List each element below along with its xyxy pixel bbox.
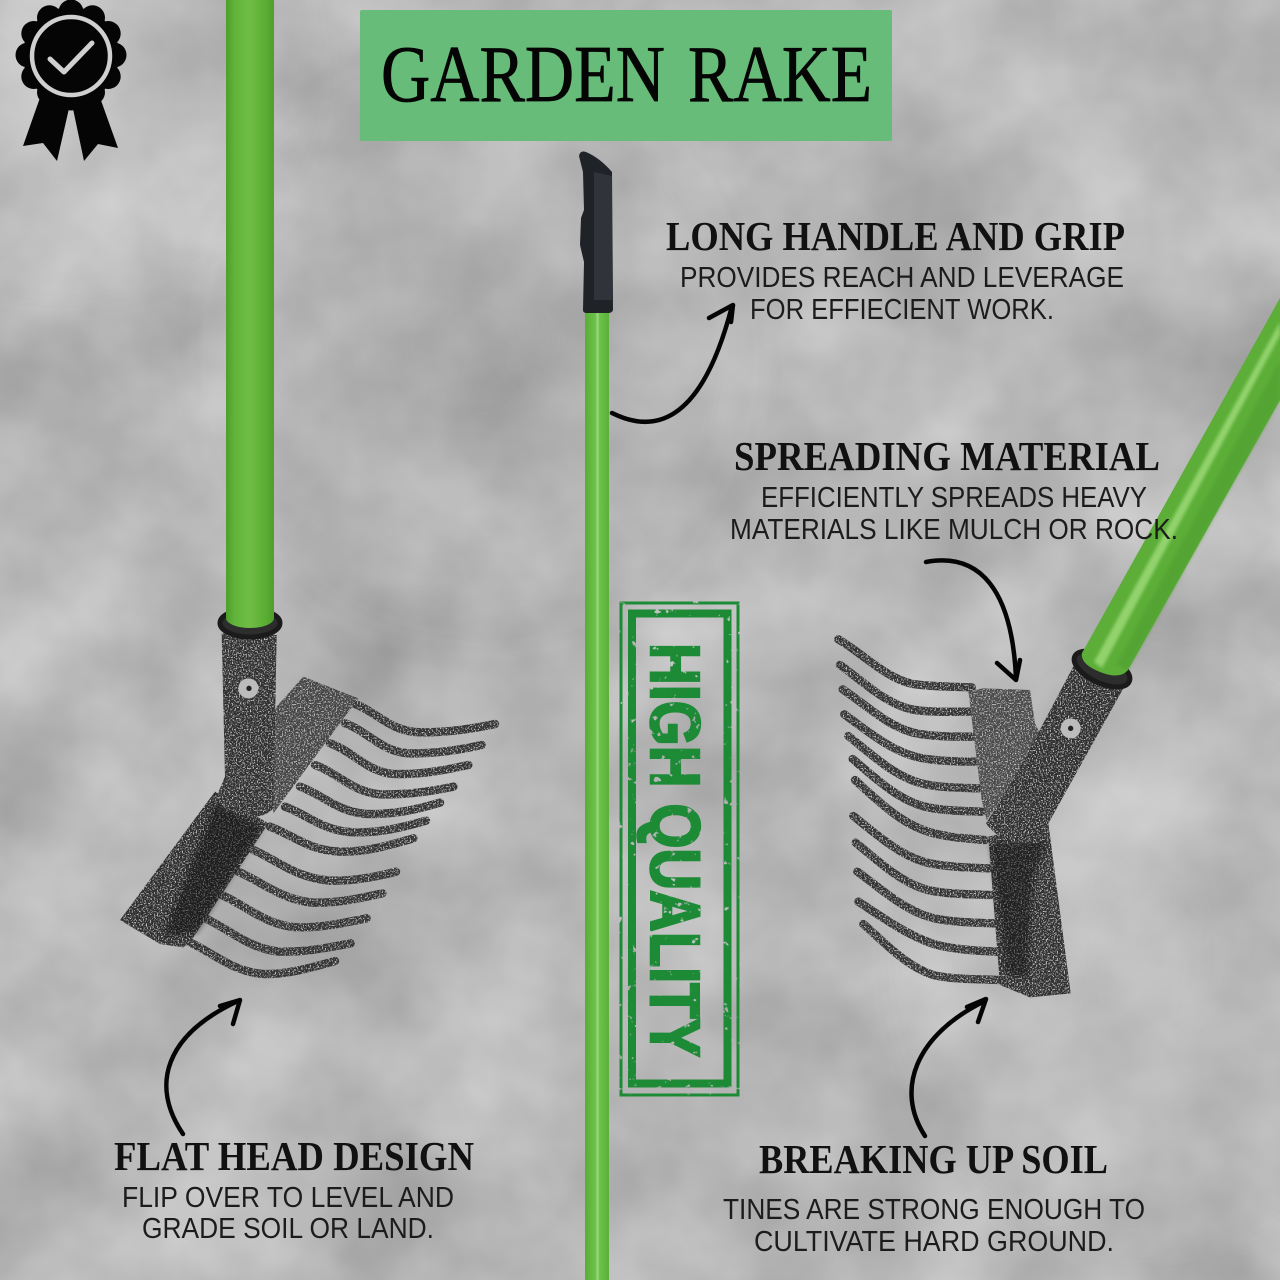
left rake lower plate	[120, 792, 268, 947]
callout: spreading material: SPREADING MATERIAL	[734, 433, 1160, 479]
right rake tines	[838, 639, 1001, 980]
left rake bolt	[238, 678, 258, 698]
title banner	[360, 10, 892, 141]
callout: long handle and grip: FOR EFFIECIENT WORK.	[750, 294, 1054, 326]
stamp: high quality: HIGH QUALITY	[636, 643, 714, 1057]
arrow: to handle	[612, 305, 733, 422]
callout: spreading material: MATERIALS LIKE MULCH OR ROCK.	[730, 514, 1178, 546]
callout: flat head design: FLIP OVER TO LEVEL AND	[122, 1182, 454, 1214]
arrow: to tines	[912, 999, 986, 1136]
arrow: to spreading plate	[926, 560, 1020, 680]
stamp: high quality	[621, 603, 738, 1095]
right rake lower plate	[988, 823, 1071, 997]
left rake socket	[215, 633, 277, 817]
left rake head	[120, 633, 495, 974]
left rake handle	[226, 0, 274, 628]
callout: long handle and grip: PROVIDES REACH AND LEVERAGE	[680, 262, 1124, 294]
left rake upper plate	[267, 677, 358, 813]
left rake collar ring	[220, 609, 280, 637]
right rake upper plate	[968, 688, 1043, 820]
callout: breaking up soil: BREAKING UP SOIL	[759, 1136, 1108, 1182]
left rake plate shadow	[163, 803, 263, 937]
callout: breaking up soil	[723, 1136, 1145, 1258]
title banner: GARDEN	[381, 31, 665, 119]
right rake plate shadow	[990, 840, 1048, 980]
arrow: to flat head	[166, 1000, 240, 1134]
left rake tines	[188, 703, 495, 974]
callout: flat head design: GRADE SOIL OR LAND.	[142, 1213, 434, 1245]
title banner: RAKE	[688, 31, 872, 119]
right rake head	[838, 639, 1123, 997]
badge icon: ribbon with check mark	[16, 0, 126, 161]
right rake collar ring	[1069, 644, 1135, 694]
right rake socket	[986, 663, 1123, 844]
callout: flat head design	[114, 1133, 474, 1245]
callout: flat head design: FLAT HEAD DESIGN	[114, 1133, 474, 1179]
center handle	[585, 310, 609, 1280]
callout: long handle and grip	[666, 213, 1125, 326]
callout: spreading material: EFFICIENTLY SPREADS HEAVY	[761, 482, 1147, 514]
grip	[579, 152, 613, 313]
callout: spreading material	[730, 433, 1178, 546]
right rake bolt	[1061, 718, 1081, 738]
callout: breaking up soil: TINES ARE STRONG ENOUGH TO	[723, 1194, 1145, 1226]
right rake handle	[1082, 298, 1280, 676]
callout: long handle and grip: LONG HANDLE AND GRIP	[666, 213, 1125, 259]
callout: breaking up soil: CULTIVATE HARD GROUND.	[754, 1226, 1114, 1258]
